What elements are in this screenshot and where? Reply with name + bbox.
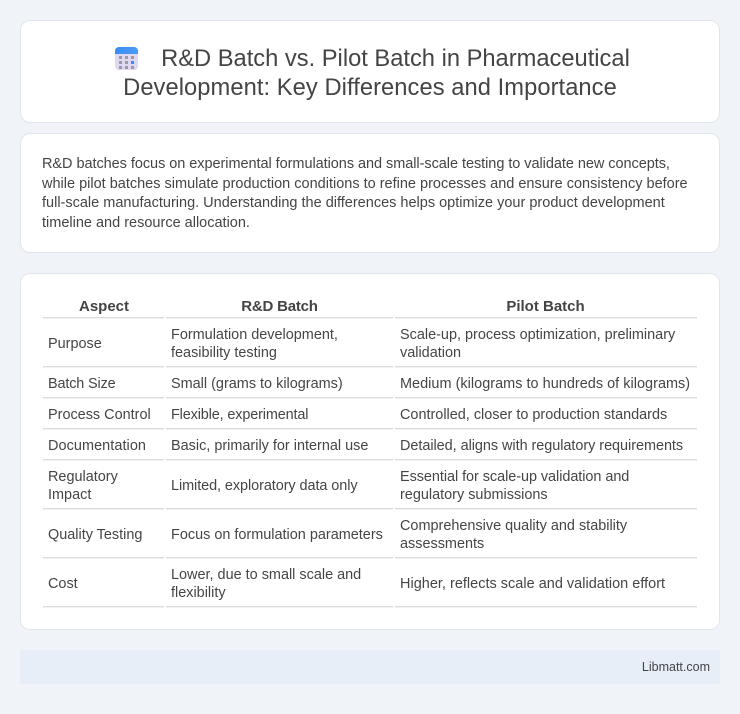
comparison table: [43, 298, 697, 608]
row: quality testing: Quality Testing: [48, 527, 142, 543]
row: process control: Flexible, experimental: [171, 407, 308, 423]
row: purpose: Formulation development,: [171, 327, 338, 343]
row: regulatory impact: Regulatory: [48, 469, 118, 485]
row: purpose: [48, 327, 676, 361]
row: cost: Higher, reflects scale and validation effort: [400, 576, 665, 592]
icon: calendar: [115, 47, 138, 70]
column headers: R&D Batch: [241, 298, 318, 315]
row: quality testing: assessments: [400, 536, 484, 552]
intro paragraph: full-scale manufacturing. Understanding the differences helps optimize your product development: [42, 195, 665, 211]
row: regulatory impact: Impact: [48, 487, 91, 503]
row: quality testing: [48, 518, 627, 552]
row: process control: [48, 407, 667, 423]
row: process control: Process Control: [48, 407, 151, 423]
intro paragraph: timeline and resource allocation.: [42, 215, 250, 231]
row: documentation: Detailed, aligns with regulatory requirements: [400, 438, 683, 454]
title: Development: Key Differences and Importance: [123, 75, 617, 101]
row: regulatory impact: regulatory submissions: [400, 487, 548, 503]
row: purpose: Purpose: [48, 336, 102, 352]
row: regulatory impact: Essential for scale-up validation and: [400, 469, 629, 485]
row: quality testing: Focus on formulation parameters: [171, 527, 383, 543]
table card: [20, 273, 720, 630]
footer bar: [20, 650, 720, 684]
row: regulatory impact: [48, 469, 629, 503]
row: documentation: [48, 438, 683, 454]
intro paragraph: [42, 156, 688, 231]
row: batch size: Small (grams to kilograms): [171, 376, 343, 392]
row: cost: flexibility: [171, 585, 226, 601]
row: purpose: Scale-up, process optimization, preliminary: [400, 327, 675, 343]
row: cost: Cost: [48, 576, 78, 592]
row: regulatory impact: Limited, exploratory data only: [171, 478, 358, 494]
row: quality testing: Comprehensive quality and stability: [400, 518, 627, 534]
row: batch size: Medium (kilograms to hundreds of kilograms): [400, 376, 690, 392]
row: cost: Lower, due to small scale and: [171, 567, 361, 583]
row: cost: [48, 567, 665, 601]
row: documentation: Basic, primarily for internal use: [171, 438, 368, 454]
row: batch size: [48, 376, 690, 392]
column headers: Aspect: [79, 298, 129, 315]
row: purpose: feasibility testing: [171, 345, 277, 361]
column headers: [79, 298, 585, 315]
intro paragraph: R&D batches focus on experimental formulations and small-scale testing to validate new concepts,: [42, 156, 670, 172]
row: process control: Controlled, closer to production standards: [400, 407, 667, 423]
column headers: Pilot Batch: [506, 298, 585, 315]
row: purpose: validation: [400, 345, 461, 361]
header card: [20, 20, 720, 123]
footer credit: Libmatt.com: [642, 660, 710, 674]
intro paragraph: while pilot batches simulate production conditions to refine processes and ensure consistency before: [42, 176, 688, 192]
intro text card: [20, 133, 720, 253]
title: [123, 46, 630, 101]
row: documentation: Documentation: [48, 438, 146, 454]
row: batch size: Batch Size: [48, 376, 116, 392]
title: R&D Batch vs. Pilot Batch in Pharmaceutical: [161, 46, 630, 72]
